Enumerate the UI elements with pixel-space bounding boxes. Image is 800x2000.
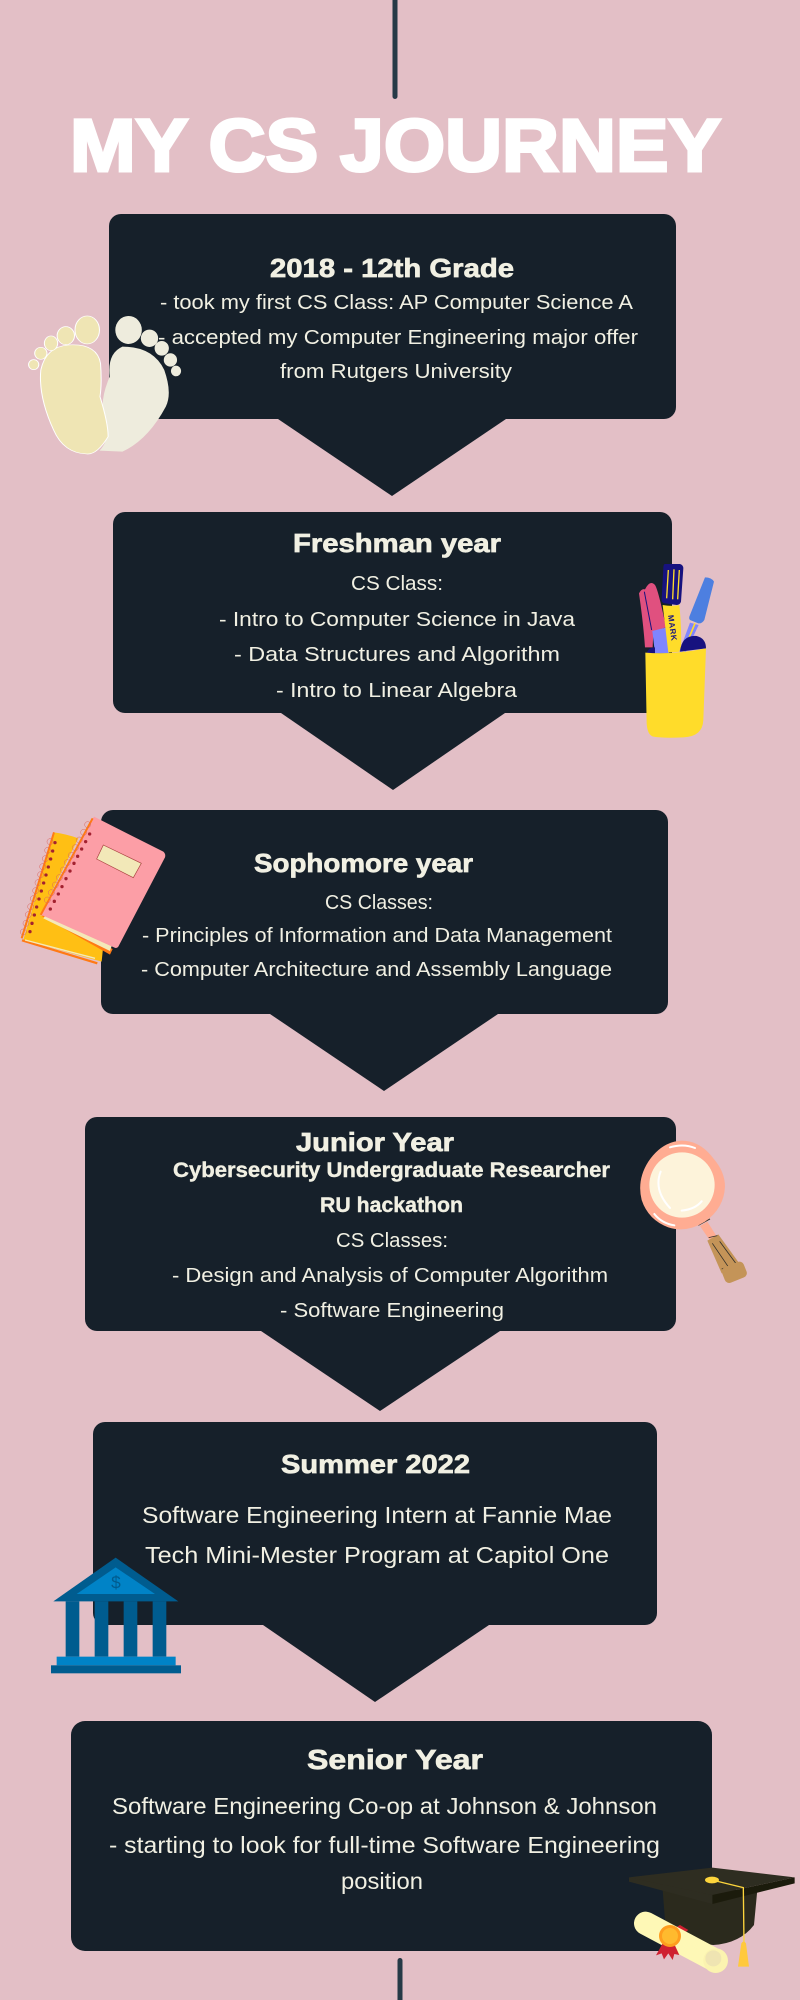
icon: pencil cup: MARK xyxy=(666,614,679,642)
panel: sophomore year xyxy=(101,810,668,1091)
panel 4 highlights: RU hackathon xyxy=(320,1194,463,1217)
panel 6 text: position xyxy=(341,1868,423,1894)
panel 6 box xyxy=(71,1721,712,1951)
icon: magnifying glass xyxy=(640,1141,748,1284)
panel 2 text: - Intro to Linear Algebra xyxy=(276,680,518,702)
panel: freshman year xyxy=(113,512,672,790)
icon: pencil cup xyxy=(639,564,714,738)
panel 4 highlights: Cybersecurity Undergraduate Researcher xyxy=(173,1159,610,1182)
panel: summer 2022 xyxy=(93,1422,657,1702)
panel 6 heading: Senior Year xyxy=(307,1744,483,1775)
panel 3 arrow xyxy=(270,1014,498,1091)
panel 2 text: - Data Structures and Algorithm xyxy=(234,644,560,666)
panel 6 text: - starting to look for full-time Software Engineering xyxy=(109,1832,660,1858)
panel 4 highlights xyxy=(173,1159,610,1217)
panel 1 text xyxy=(158,292,638,383)
panel 1 text: from Rutgers University xyxy=(280,361,512,383)
panel 2 text xyxy=(219,573,576,702)
panel 1 box xyxy=(109,214,676,419)
panel: junior year xyxy=(85,1117,676,1411)
panel 3 heading: Sophomore year xyxy=(254,848,473,878)
bottom connector line xyxy=(398,1958,402,2000)
panel 5 text: Software Engineering Intern at Fannie Mae xyxy=(142,1502,612,1528)
panel 3 text: - Computer Architecture and Assembly Language xyxy=(141,959,612,981)
panel 1 arrow xyxy=(278,419,506,496)
panel 5 box xyxy=(93,1422,657,1625)
panel 6 text xyxy=(109,1793,660,1894)
panel 2 box xyxy=(113,512,672,713)
panel 2 arrow xyxy=(281,713,505,790)
panel 6 text: Software Engineering Co-op at Johnson & Johnson xyxy=(112,1793,657,1819)
panel 3 text xyxy=(141,892,612,981)
panel 1 text: - took my first CS Class: AP Computer Science A xyxy=(160,292,634,314)
panel 2 heading: Freshman year xyxy=(293,528,501,558)
panel 4 text: CS Classes: xyxy=(336,1230,448,1252)
title: MY CS JOURNEY xyxy=(70,104,721,187)
panel 4 heading: Junior Year xyxy=(296,1127,454,1157)
panel 4 box xyxy=(85,1117,676,1331)
icon: graduation cap and diploma xyxy=(629,1868,795,1973)
panel 2 text: - Intro to Computer Science in Java xyxy=(219,609,576,631)
panel 4 arrow xyxy=(261,1331,500,1411)
panel 1 text: - accepted my Computer Engineering major offer xyxy=(158,327,638,349)
panel 3 box xyxy=(101,810,668,1014)
panel 5 text xyxy=(142,1502,612,1568)
panel 5 arrow xyxy=(263,1625,489,1702)
panel 5 heading: Summer 2022 xyxy=(281,1449,470,1479)
panel 1 heading: 2018 - 12th Grade xyxy=(270,253,514,283)
icon: bank building xyxy=(51,1558,181,1673)
panel 3 text: CS Classes: xyxy=(325,892,433,914)
panel: 2018 12th grade xyxy=(109,214,676,496)
panel 5 text: Tech Mini-Mester Program at Capitol One xyxy=(145,1542,609,1568)
panel 4 text xyxy=(172,1230,608,1322)
panel 4 text: - Software Engineering xyxy=(280,1300,504,1322)
panel 2 text: CS Class: xyxy=(351,573,443,595)
panel 4 text: - Design and Analysis of Computer Algorithm xyxy=(172,1265,608,1287)
panel: senior year xyxy=(71,1721,712,1951)
panel 3 text: - Principles of Information and Data Management xyxy=(142,925,612,947)
top connector line xyxy=(392,0,398,99)
icon: notebooks xyxy=(20,817,165,963)
icon: baby feet xyxy=(29,316,181,454)
icon: bank building: $ xyxy=(111,1572,121,1592)
